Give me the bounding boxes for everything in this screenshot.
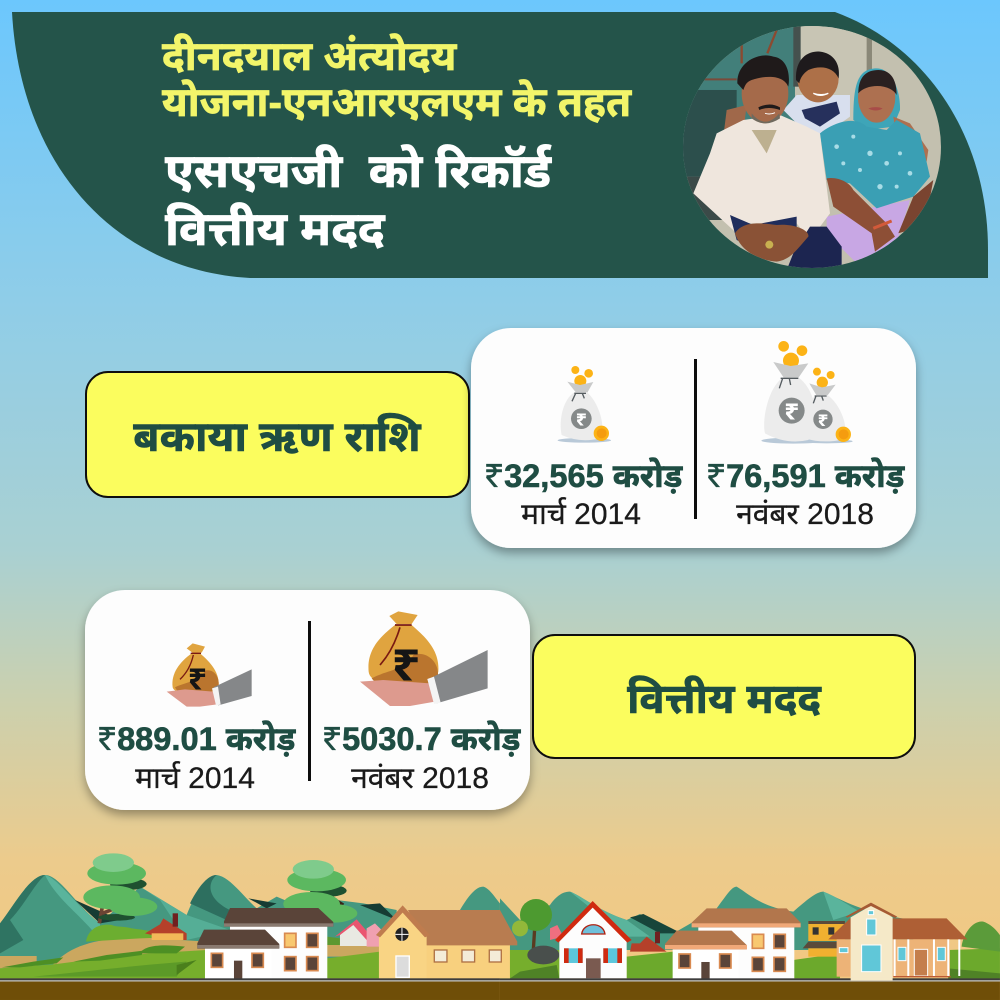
label: financial help: वित्तीय मदद bbox=[627, 675, 822, 722]
panel: financial help amounts bbox=[85, 590, 530, 810]
green field bbox=[0, 950, 207, 978]
yellow brick house bbox=[376, 905, 517, 978]
title: scheme name: दीनदयाल अंत्योदय bbox=[162, 33, 458, 79]
cream and orange house bbox=[828, 903, 967, 980]
title: scheme name: योजना-एनआरएलएम के तहत bbox=[162, 79, 632, 125]
label: outstanding loan amount bbox=[86, 372, 469, 497]
value: 889.01 crore March 2014: मार्च 2014 bbox=[135, 761, 255, 795]
white house brown roof bbox=[197, 908, 333, 979]
yellow balcony house bbox=[803, 921, 845, 957]
value: 889.01 crore March 2014 bbox=[97, 717, 296, 795]
panel: loan amounts bbox=[471, 328, 916, 548]
title: record financial help: वित्तीय मदद bbox=[165, 202, 386, 256]
bushes on hill bbox=[86, 925, 167, 942]
tan hill bbox=[53, 937, 207, 978]
value: 32,565 crore March 2014: ₹32,565 करोड़ bbox=[484, 454, 683, 495]
title: scheme name bbox=[162, 33, 632, 125]
value: 5030.7 crore November 2018: नवंबर 2018 bbox=[351, 762, 489, 795]
ground bbox=[0, 978, 500, 980]
hedges bbox=[2, 945, 187, 977]
title: record financial help: एसएचजी को रिकॉर्ड bbox=[165, 144, 552, 198]
value: 5030.7 crore November 2018: ₹5030.7 करोड़ bbox=[322, 717, 521, 758]
value: 32,565 crore March 2014 bbox=[484, 454, 683, 531]
icon: small money bag on hand: ₹ bbox=[188, 660, 207, 697]
value: 889.01 crore March 2014: ₹889.01 करोड़ bbox=[97, 717, 296, 758]
tree left bbox=[83, 853, 157, 923]
icon: single money bag: ₹ bbox=[576, 410, 587, 431]
icon: single money bag bbox=[558, 366, 611, 443]
value: 32,565 crore March 2014: मार्च 2014 bbox=[521, 497, 641, 531]
label: financial help bbox=[533, 635, 915, 758]
icon: small money bag on hand bbox=[167, 643, 252, 707]
bush bbox=[962, 922, 1000, 952]
value: 76,591 crore November 2018: नवंबर 2018 bbox=[736, 498, 874, 531]
title: record financial help bbox=[165, 144, 552, 256]
value: 76,591 crore November 2018 bbox=[706, 454, 905, 531]
value: 76,591 crore November 2018: ₹76,591 करोड़ bbox=[706, 454, 905, 495]
small house bbox=[145, 913, 187, 940]
family photo illustration bbox=[680, 20, 950, 270]
icon: two money bags: ₹ bbox=[784, 395, 799, 425]
tree bbox=[512, 899, 563, 964]
icon: large money bag on hand bbox=[360, 611, 488, 706]
pink roof house bbox=[335, 919, 382, 947]
man bbox=[724, 106, 746, 130]
value: 5030.7 crore November 2018 bbox=[322, 717, 521, 795]
header banner bbox=[12, 12, 988, 278]
label: outstanding loan amount: बकाया ऋण राशि bbox=[133, 412, 421, 461]
village scene: left bbox=[0, 853, 517, 1000]
village scene: right bbox=[500, 887, 1000, 1000]
tree right bbox=[283, 860, 357, 923]
icon: large money bag on hand: ₹ bbox=[392, 636, 420, 692]
icon: two money bags: ₹ bbox=[818, 409, 828, 430]
small house bbox=[630, 932, 667, 952]
boy bbox=[783, 95, 850, 133]
white cottage bbox=[555, 901, 632, 978]
ground bbox=[500, 978, 1000, 980]
white house terracotta roof bbox=[665, 908, 801, 979]
icon: two money bags bbox=[761, 341, 853, 444]
woman bbox=[853, 68, 900, 130]
